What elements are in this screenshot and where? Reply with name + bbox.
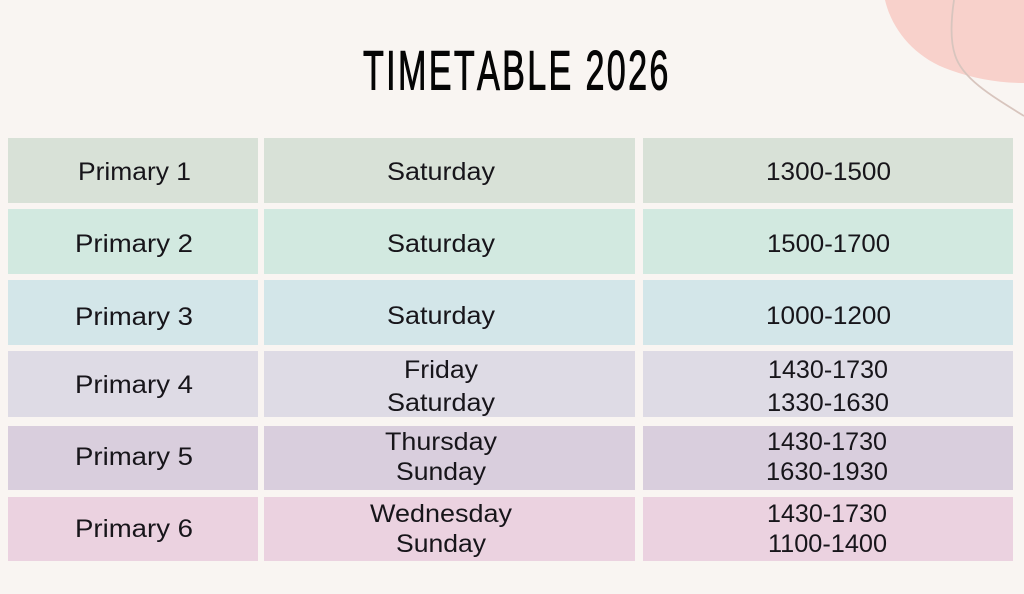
row: Primary 2: 1500-1700 [767, 230, 890, 258]
row: Primary 1: 1300-1500 [766, 158, 891, 186]
row: Primary 2: Primary 2 [75, 230, 193, 258]
row: Primary 1: Saturday [387, 158, 496, 186]
row: Primary 1: Primary 1 [78, 158, 191, 186]
row: Primary 4: 1430-1730 [768, 356, 888, 384]
row: Primary 3 [8, 280, 1013, 345]
row: Primary 4: Saturday [387, 389, 496, 417]
row: Primary 6: Sunday [396, 530, 487, 558]
row: Primary 2: Saturday [387, 230, 496, 258]
row: Primary 5: Thursday [385, 428, 498, 456]
row: Primary 5 [8, 426, 1013, 490]
row: Primary 4 [8, 351, 1013, 417]
row: Primary 6: 1430-1730 [767, 500, 887, 528]
row: Primary 4: Primary 4 [75, 371, 193, 399]
row: Primary 6: Wednesday [370, 500, 513, 528]
row: Primary 5: Primary 5 [75, 443, 193, 471]
row: Primary 6: 1100-1400 [768, 530, 887, 558]
row: Primary 3: Primary 3 [75, 303, 193, 331]
title: TIMETABLE 2026 [363, 39, 671, 102]
row: Primary 4: 1330-1630 [767, 389, 889, 417]
icon: decorative pink blob [885, 0, 1024, 83]
row: Primary 1 [8, 138, 1013, 203]
row: Primary 4: Friday [404, 356, 479, 384]
row: Primary 6 [8, 497, 1013, 561]
row: Primary 2 [8, 209, 1013, 274]
row: Primary 5: 1430-1730 [767, 428, 887, 456]
row: Primary 6: Primary 6 [75, 515, 193, 543]
icon: decorative curved line [952, 0, 1024, 116]
row: Primary 5: 1630-1930 [766, 458, 888, 486]
row: Primary 3: 1000-1200 [766, 302, 891, 330]
row: Primary 3: Saturday [387, 302, 496, 330]
row: Primary 5: Sunday [396, 458, 487, 486]
